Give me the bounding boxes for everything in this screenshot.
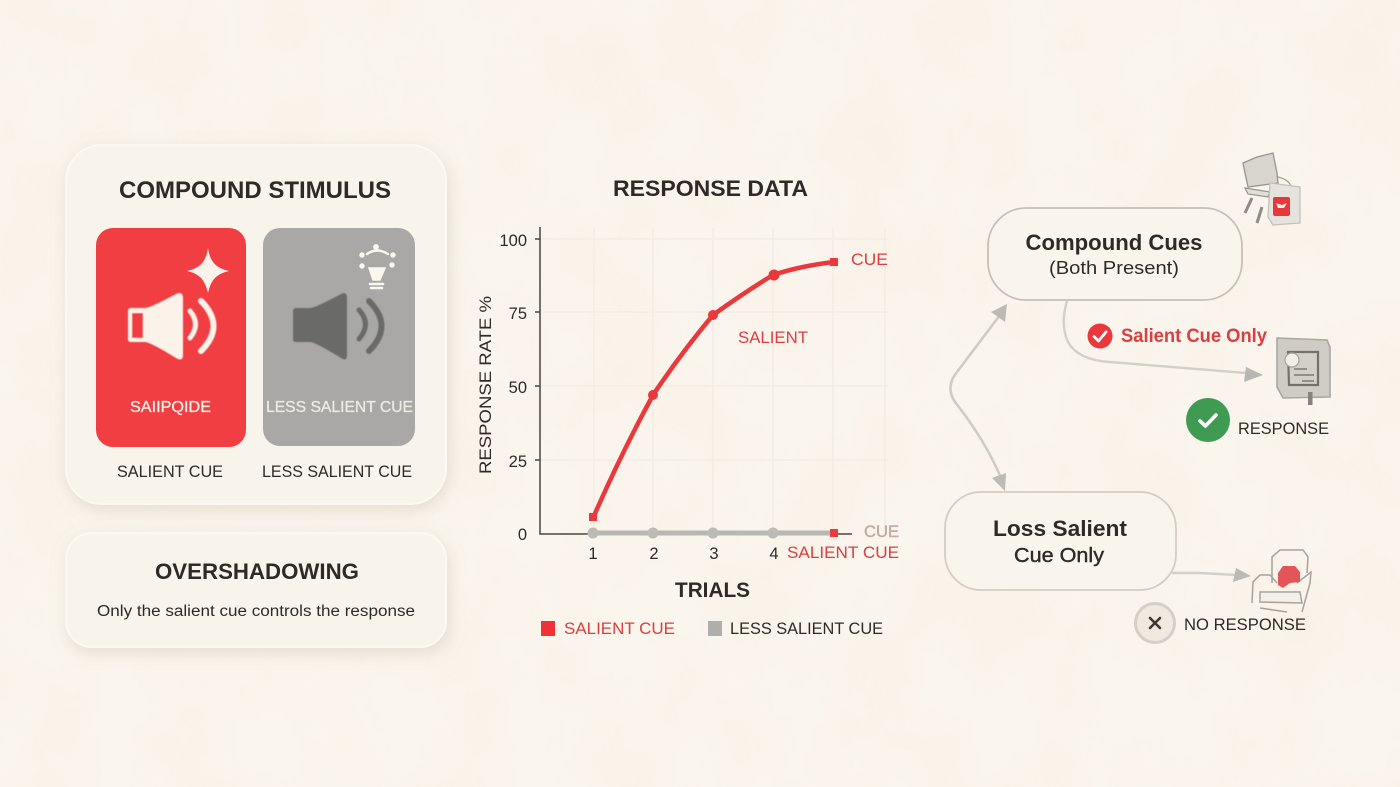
x axis labels: 3 — [709, 545, 719, 563]
icon: red check — [1088, 324, 1112, 348]
panel: compound stimulus — [66, 145, 446, 504]
x axis labels: 1 — [588, 545, 598, 563]
icon: speaker — [128, 293, 214, 359]
box: compound cues: (Both Present) — [1049, 258, 1179, 278]
label: salient cue only: Salient Cue Only — [1121, 326, 1267, 347]
panel: overshadowing — [66, 533, 446, 647]
y axis: 75 — [509, 305, 527, 323]
card label: garbled salient text: SAIIPQIDE — [130, 399, 211, 416]
box: less salient cue only: Cue Only — [1014, 545, 1104, 567]
y axis — [499, 227, 852, 544]
icon: sparkle — [187, 248, 229, 293]
y axis: 50 — [509, 379, 527, 397]
x axis labels — [588, 545, 779, 563]
text: overshadowing description: Only the salient cue controls the response — [97, 603, 415, 620]
icon: green check — [1186, 398, 1230, 442]
marker: salient end point — [830, 529, 838, 537]
arrow: compound to response — [1064, 301, 1263, 382]
caption: less salient cue: LESS SALIENT CUE — [262, 462, 412, 481]
heading: compound stimulus: COMPOUND STIMULUS — [119, 177, 391, 204]
legend — [541, 620, 883, 638]
label: salient cue: SALIENT CUE — [787, 544, 899, 562]
x axis title: TRIALS — [675, 579, 750, 602]
box: less salient cue only — [945, 492, 1176, 590]
y axis: 0 — [518, 526, 527, 544]
caption: salient cue: SALIENT CUE — [117, 462, 223, 481]
label: response: RESPONSE — [1238, 419, 1329, 438]
card: salient cue — [96, 228, 246, 447]
y axis: 100 — [499, 232, 527, 250]
label: faded cue: CUE — [864, 523, 899, 541]
card label: less salient cue: LESS SALIENT CUE — [266, 399, 413, 416]
icon: document — [1277, 338, 1330, 405]
legend: SALIENT CUE — [564, 620, 675, 638]
line: less salient cue — [588, 528, 833, 538]
icon: grey cross — [1136, 604, 1174, 642]
box: less salient cue only: Loss Salient — [993, 516, 1128, 541]
icon: chair with red badge — [1243, 153, 1300, 225]
y axis title: RESPONSE RATE % — [476, 296, 495, 474]
arrow: less salient to no response — [1172, 568, 1251, 582]
icon: armchair with red cushion — [1252, 550, 1311, 612]
y axis: 25 — [509, 453, 527, 471]
icon: muted speaker — [293, 293, 382, 359]
arrow: two-way branch — [950, 304, 1007, 491]
card: less salient cue — [263, 228, 415, 446]
x axis labels: 2 — [649, 545, 659, 563]
label: cue: CUE — [851, 251, 888, 269]
label: salient: SALIENT — [738, 329, 808, 347]
label: no response: NO RESPONSE — [1184, 615, 1306, 634]
chart: response data — [476, 176, 899, 638]
heading: overshadowing: OVERSHADOWING — [155, 559, 359, 584]
legend: LESS SALIENT CUE — [730, 620, 883, 638]
line: salient cue — [589, 258, 838, 521]
box: compound cues — [988, 208, 1242, 300]
heading: response data: RESPONSE DATA — [613, 176, 808, 201]
icon: light bulb — [360, 245, 395, 288]
x axis labels: 4 — [769, 545, 779, 563]
box: compound cues: Compound Cues — [1026, 230, 1202, 255]
